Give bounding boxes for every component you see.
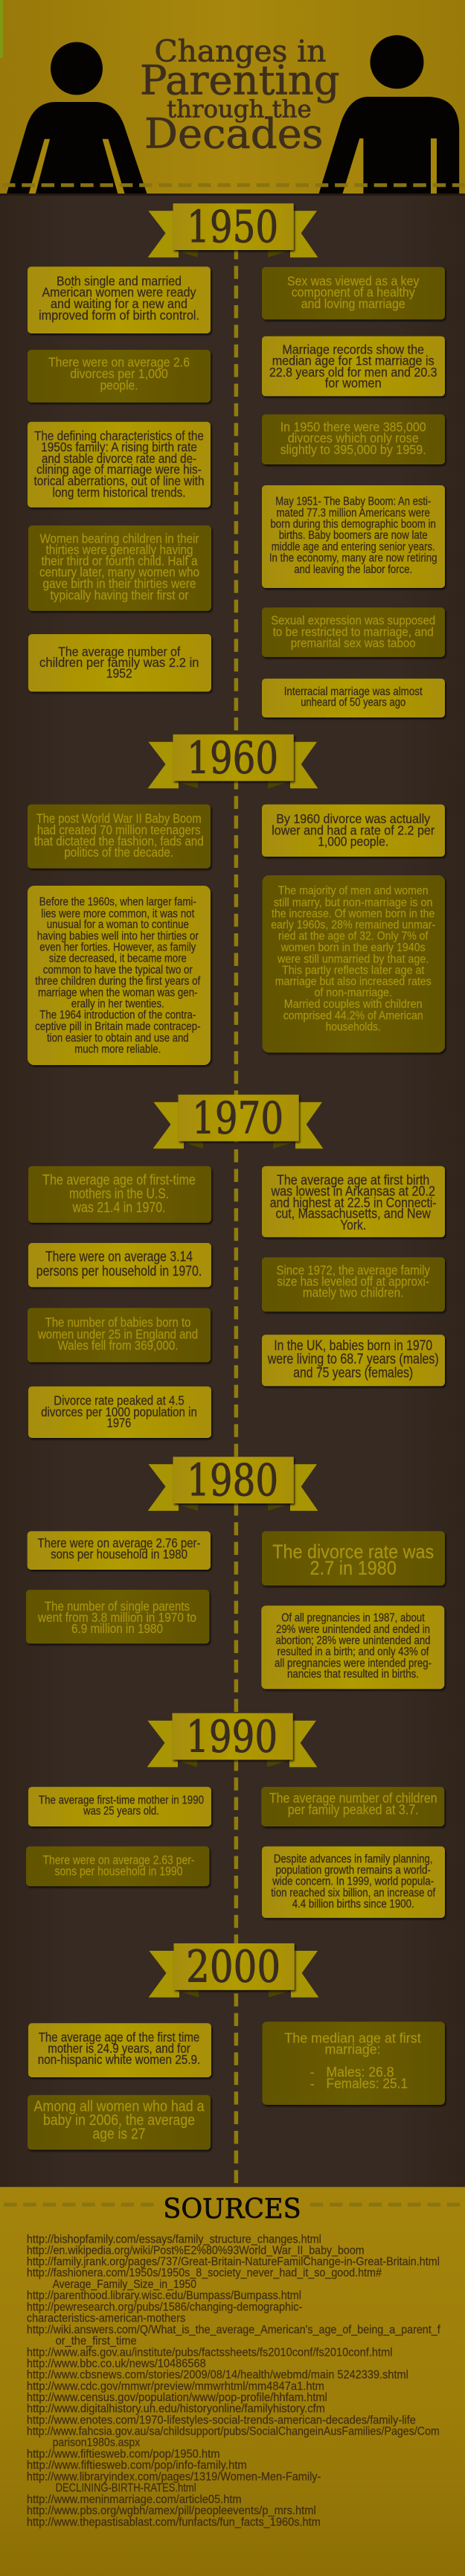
panel: 1950s family: 1950s family: A rising birth rate xyxy=(41,440,197,455)
panel: before the 1960s: size decreased, it became more xyxy=(49,953,187,965)
panel: first-time mothers 1970 xyxy=(28,1166,211,1223)
panel: pregnancies in 1987 xyxy=(261,1605,444,1689)
panel: baby boom: middle age and entering senior years. xyxy=(272,540,435,553)
panel: before the 1960s: unusual for a woman to continue xyxy=(47,918,189,931)
panel: persons per household 1970 xyxy=(28,1243,211,1287)
panel: women in thirties: gave birth in their thirties were xyxy=(43,576,196,591)
header panel xyxy=(0,0,465,196)
background: dark timeline xyxy=(0,194,465,2187)
panel: persons per household 1970: persons per household in 1970. xyxy=(36,1264,202,1279)
panel: sex and marriage xyxy=(262,267,445,319)
heading: sources: SOURCES xyxy=(163,2193,301,2225)
panel: women in thirties xyxy=(28,525,211,611)
panel: non-marriage on the increase: comprised 44.2% of American xyxy=(283,1009,423,1022)
source link list: parison1980s.aspx xyxy=(53,2437,140,2449)
panel: before the 1960s: common to have the typical two or xyxy=(43,964,193,977)
panel: first-time mother 1990: The average first-time mother in 1990 xyxy=(39,1794,204,1806)
panel: divorce by 1960: By 1960 divorce was actually xyxy=(276,811,430,826)
source link list: http://www.digitalhistory.uh.edu/historyonline/familyhistory.cfm xyxy=(27,2403,325,2415)
panel: non-marriage on the increase: still marry, but non-marriage is on xyxy=(274,896,433,909)
panel: 1950s family: torical aberrations, out of line with xyxy=(34,473,204,488)
panel: divorces per 1,000 xyxy=(28,350,211,403)
panel: before the 1960s xyxy=(28,886,211,1065)
source link list: http://www.fiftiesweb.com/pop/1950.htm xyxy=(27,2448,220,2461)
panel: 1950s family: and stable divorce rate and de- xyxy=(42,451,196,466)
panel: non-marriage on the increase: The majority of men and women xyxy=(278,885,429,898)
panel: birth control: and waiting for a new and xyxy=(51,296,187,311)
panel: divorces per 1,000: divorces per 1,000 xyxy=(70,366,168,381)
panel: sexual expression xyxy=(262,607,445,657)
panel: non-marriage on the increase: early 1960s, 28% remained unmar- xyxy=(271,919,435,932)
panel: interracial marriage: Interracial marriage was almost xyxy=(284,685,423,698)
panel: divorce rate 1980: The divorce rate was xyxy=(272,1540,434,1562)
panel: age at first birth by state: cut, Massachusetts, and New xyxy=(275,1206,432,1221)
panel: post-war teenagers: politics of the decade. xyxy=(64,845,173,860)
panel: pregnancies in 1987: 29% were unintended and ended in xyxy=(276,1623,430,1636)
decade ribbon: 1990 xyxy=(147,1710,317,1767)
icon: right parent figure xyxy=(319,35,459,194)
panel: first-time mother 1990 xyxy=(28,1787,211,1826)
panel: divorce by 1960: lower and had a rate of 2.2 per xyxy=(272,823,434,838)
panel: single parents: The number of single parents xyxy=(45,1599,190,1614)
source link list: http://parenthood.library.wisc.edu/Bumpass/Bumpass.html xyxy=(27,2289,301,2302)
decade ribbon: 2000 xyxy=(149,1941,318,1998)
panel: family size since 1972 xyxy=(262,1257,445,1311)
panel: family size since 1972: mately two children. xyxy=(303,1285,403,1300)
panel: before the 1960s: three children during the first years of xyxy=(35,975,201,988)
title xyxy=(140,35,340,157)
panel: median age at first marriage: The median age at first xyxy=(284,2030,421,2046)
decade ribbon: 1950: 1950 xyxy=(187,201,278,252)
panel: world population: 4.4 billion births since 1900. xyxy=(292,1898,414,1911)
panel: UK life expectancy: were living to 68.7 years (males) xyxy=(267,1352,439,1367)
panel: non-marriage on the increase: households. xyxy=(326,1021,381,1034)
panel: divorce rate peak: Divorce rate peaked at 4.5 xyxy=(54,1393,185,1408)
panel: average age 2006 xyxy=(28,2095,211,2150)
source link list: http://www.census.gov/population/www/pop-profile/hhfam.html xyxy=(27,2391,327,2404)
panel: divorces 1950 to 1959: divorces which only rose xyxy=(288,431,419,446)
panel: before the 1960s: The 1964 introduction of the contra- xyxy=(39,1009,196,1022)
panel: baby boom: May 1951- The Baby Boom: An esti- xyxy=(275,496,431,508)
panel: divorces per 1,000: There were on average 2.6 xyxy=(48,355,190,370)
source link list: http://www.meninmarriage.com/article05.htm xyxy=(27,2493,242,2506)
panel: divorces 1950 to 1959: In 1950 there were 385,000 xyxy=(280,419,426,434)
panel: women in thirties: typically having their first or xyxy=(51,587,189,602)
panel: non-marriage on the increase xyxy=(262,875,445,1052)
panel: divorce rate 1980: 2.7 in 1980 xyxy=(310,1557,397,1579)
panel: average age 2006: age is 27 xyxy=(92,2126,146,2142)
panel: divorce by 1960 xyxy=(262,805,445,857)
panel: average age 2006: baby in 2006, the average xyxy=(43,2112,195,2129)
panel: sources xyxy=(0,2187,465,2576)
panel: babies born to women under 25: The number of babies born to xyxy=(45,1315,190,1330)
title: Parenting xyxy=(140,57,340,104)
icon: left parent figure xyxy=(7,42,147,194)
title: through the xyxy=(167,95,312,123)
panel: family size since 1972: size has leveled off at approxi- xyxy=(277,1273,429,1288)
panel: divorce rate 1980 xyxy=(262,1531,445,1585)
panel: world population xyxy=(262,1847,445,1918)
panel: post-war teenagers: The post World War II Baby Boom xyxy=(36,811,202,826)
panel: divorce rate peak: divorces per 1000 population in xyxy=(41,1404,197,1419)
panel: before the 1960s: tion easier to obtain and use and xyxy=(47,1032,189,1044)
panel: median marriage age: 22.8 years old for men and 20.3 xyxy=(269,365,437,380)
source link list: http://www.pbs.org/wgbh/amex/pill/peopleevents/p_mrs.html xyxy=(27,2505,316,2517)
source link list: http://pewresearch.org/pubs/1586/changing-demographic- xyxy=(27,2301,302,2313)
decade ribbon: 1960: 1960 xyxy=(187,732,278,783)
source link list xyxy=(27,2233,440,2529)
panel: non-marriage on the increase: This partly reflects later age at xyxy=(282,965,425,977)
panel: children per family 1952: 1952 xyxy=(106,666,132,681)
panel: pregnancies in 1987: nancies that resulted in births. xyxy=(287,1668,419,1681)
panel: before the 1960s: having babies well into her thirties or xyxy=(37,930,199,943)
panel: birth control: Both single and married xyxy=(57,273,182,288)
panel: non-marriage on the increase: ried at the age of 32. Only 7% of xyxy=(278,930,429,943)
panel: before the 1960s: Before the 1960s, when larger fami- xyxy=(39,896,196,909)
panel: 1950s family: clining age of marriage were his- xyxy=(36,462,202,477)
panel: average age 2006: Among all women who had a xyxy=(34,2099,205,2115)
panel: median marriage age: Marriage records show the xyxy=(282,342,424,357)
decade ribbon: 2000: 2000 xyxy=(186,1941,280,1992)
source link list: http://www.libraryindex.com/pages/1319/Women-Men-Family- xyxy=(27,2471,321,2484)
decade ribbon: 1980: 1980 xyxy=(187,1454,278,1506)
panel: median marriage age xyxy=(262,336,445,396)
panel: UK life expectancy xyxy=(262,1335,445,1386)
panel: birth control: American women were ready xyxy=(42,285,196,300)
panel: age at first birth by state xyxy=(262,1166,445,1237)
panel: persons per household 1990: There were on average 2.63 per- xyxy=(43,1854,195,1867)
panel: single parents xyxy=(26,1590,210,1643)
panel: sexual expression: Sexual expression was supposed xyxy=(271,613,435,627)
source link list: http://www.enotes.com/1970-lifestyles-social-trends-american-decades/family-life xyxy=(27,2414,416,2426)
panel: birth control: improved form of birth control. xyxy=(39,307,199,322)
panel: 1950s family: long term historical trends. xyxy=(52,485,186,499)
panel: baby boom: born during this demographic boom in xyxy=(270,518,436,531)
panel: divorces per 1,000: people. xyxy=(100,377,138,392)
panel: age at first birth by state: and highest at 22.5 in Connecti- xyxy=(270,1195,437,1210)
panel: non-marriage on the increase: women born in the early 1940s xyxy=(280,942,426,954)
decade ribbon: 1990: 1990 xyxy=(186,1710,278,1762)
panel: persons per household 1990 xyxy=(26,1847,210,1886)
panel: pregnancies in 1987: all pregnancies were intended preg- xyxy=(275,1657,432,1669)
panel: interracial marriage xyxy=(262,679,445,717)
panel: first-time mother 1990: was 25 years old. xyxy=(83,1805,159,1818)
panel: world population: Despite advances in family planning, xyxy=(274,1853,433,1865)
panel: non-marriage on the increase: were still unmarried by that age. xyxy=(277,953,429,965)
panel: median age at first marriage: Males: 26.8 xyxy=(326,2064,394,2080)
panel: babies born to women under 25: women under 25 in England and xyxy=(37,1326,198,1341)
panel: first-time mothers 1970: was 21.4 in 1970. xyxy=(72,1201,165,1216)
source link list: http://www.fiftiesweb.com/pop/info-family.htm xyxy=(27,2459,247,2472)
decade ribbon: 1970 xyxy=(153,1092,323,1148)
source link list: http://www.aifs.gov.au/institute/pubs/factssheets/fs2010conf/fs2010conf.html xyxy=(27,2346,393,2359)
panel: non-marriage on the increase: Married couples with children xyxy=(284,998,423,1011)
panel: divorces 1950 to 1959 xyxy=(262,415,445,464)
panel: divorces 1950 to 1959: slightly to 395,000 by 1959. xyxy=(280,442,426,457)
panel: age at first birth by state: was lowest in Arkansas at 20.2 xyxy=(271,1183,435,1199)
panel: before the 1960s: erally in her twenties. xyxy=(71,998,164,1011)
panel: babies born to women under 25: Wales fell from 369,000. xyxy=(58,1337,179,1352)
panel: post-war teenagers xyxy=(28,805,211,869)
panel: single parents: went from 3.8 million in 1970 to xyxy=(37,1610,196,1625)
panel: median age at first marriage: Females: 25.1 xyxy=(326,2076,408,2091)
panel: single parents: 6.9 million in 1980 xyxy=(71,1621,163,1636)
panel: baby boom: In the economy, many are now retiring xyxy=(269,552,437,564)
title: Changes in xyxy=(155,35,326,69)
panel: birth control xyxy=(28,266,211,333)
panel: women in thirties: Women bearing children in their xyxy=(40,531,199,546)
panel: persons per household 1980 xyxy=(28,1531,211,1570)
panel: persons per household 1980: sons per household in 1980 xyxy=(51,1547,187,1562)
panel: first-time mother age 2000: mother is 24.9 years, and for xyxy=(48,2041,190,2056)
source link list: http://fashionera.com/1950s/1950s_8_society_never_had_it_so_good.htm# xyxy=(27,2267,382,2280)
panel: babies born to women under 25 xyxy=(28,1308,211,1362)
panel: children per family 1952 xyxy=(28,634,211,691)
panel: world population: tion reached six billion, an increase of xyxy=(271,1887,436,1899)
panel: non-marriage on the increase: the increase. Of women born in the xyxy=(272,907,434,920)
source link list: http://www.cdc.gov/mmwr/preview/mmwrhtml/mm4847a1.htm xyxy=(27,2380,324,2393)
source link list: characteristics-american-mothers xyxy=(27,2312,185,2324)
panel: children per family 1952: children per family was 2.2 in xyxy=(39,655,199,670)
panel: divorce rate peak xyxy=(28,1387,211,1438)
panel: sex and marriage: Sex was viewed as a key xyxy=(287,273,420,288)
decade ribbon: 1980 xyxy=(148,1454,318,1511)
panel: 1950s family xyxy=(28,422,211,508)
panel: women in thirties: thirties were generally having xyxy=(46,542,193,557)
panel: persons per household 1970: There were on average 3.14 xyxy=(45,1250,193,1265)
panel: first-time mother age 2000: The average age of the first time xyxy=(39,2030,199,2045)
panel: age at first birth by state: York. xyxy=(340,1217,366,1233)
panel: pregnancies in 1987: abortion; 28% were unintended and xyxy=(275,1634,430,1647)
panel: persons per household 1980: There were on average 2.76 per- xyxy=(37,1535,201,1550)
decade ribbon: 1970: 1970 xyxy=(192,1092,283,1143)
source link list: or_the_first_time xyxy=(56,2335,137,2348)
panel: divorce by 1960: 1,000 people. xyxy=(318,834,388,849)
panel: before the 1960s: marriage when the woman was gen- xyxy=(38,986,198,999)
panel: post-war teenagers: had created 70 million teenagers xyxy=(37,822,201,837)
panel: sex and marriage: and loving marriage xyxy=(301,296,405,311)
panel: world population: wide concern. In 1999, world popula- xyxy=(272,1876,434,1888)
source link list: http://www.thepastisablast.com/funfacts/fun_facts_1960s.htm xyxy=(27,2516,321,2529)
panel: first-time mother age 2000: non-hispanic white women 25.9. xyxy=(38,2052,200,2067)
panel: children per family 1952: The average number of xyxy=(58,644,180,659)
panel: median age at first marriage: marriage: xyxy=(324,2042,381,2057)
source link list: http://en.wikipedia.org/wiki/Post%E2%80%93World_War_II_baby_boom xyxy=(27,2245,365,2257)
panel: world population: population growth remains a world- xyxy=(275,1864,431,1877)
panel: baby boom: mated 77.3 million Americans were xyxy=(276,507,430,520)
panel: women in thirties: century later, many women who xyxy=(39,565,199,580)
panel: before the 1960s: much more reliable. xyxy=(74,1043,161,1055)
panel: children per family 1990 xyxy=(261,1787,444,1826)
panel: sexual expression: premarital sex was taboo xyxy=(291,636,416,651)
panel: median age at first marriage xyxy=(262,2022,445,2105)
source link list: http://www.bbc.co.uk/news/10486568 xyxy=(27,2357,206,2370)
panel: UK life expectancy: In the UK, babies born in 1970 xyxy=(274,1338,432,1354)
panel: persons per household 1990: sons per household in 1990 xyxy=(55,1865,183,1879)
panel: interracial marriage: unheard of 50 years ago xyxy=(301,697,405,709)
panel: before the 1960s: even her forties. However, as family xyxy=(39,942,196,954)
panel: baby boom: births. Baby boomers are now late xyxy=(279,529,428,542)
panel: pregnancies in 1987: resulted in a birth; and only 43% of xyxy=(277,1646,429,1658)
panel: post-war teenagers: that dictated the fashion, fads and xyxy=(34,834,204,848)
panel: first-time mothers 1970: The average age of first-time xyxy=(42,1173,196,1189)
panel: children per family 1990: per family peaked at 3.7. xyxy=(288,1801,419,1817)
panel: age at first birth by state: The average age at first birth xyxy=(277,1172,429,1188)
source link list: http://bishopfamily.com/essays/family_structure_changes.html xyxy=(27,2233,321,2246)
source link list: Average_Family_Size_in_1950 xyxy=(53,2278,196,2291)
decade ribbon: 1950 xyxy=(148,201,318,258)
panel: UK life expectancy: and 75 years (females) xyxy=(293,1366,413,1381)
panel: sexual expression: to be restricted to marriage, and xyxy=(273,625,434,639)
panel: family size since 1972: Since 1972, the average family xyxy=(276,1262,430,1277)
panel: median marriage age: median age for 1st marriage is xyxy=(272,353,434,368)
panel: 1950s family: The defining characteristics of the xyxy=(34,429,204,444)
panel: non-marriage on the increase: marriage but also increased rates xyxy=(275,976,432,988)
panel: median marriage age: for women xyxy=(325,376,382,391)
panel: pregnancies in 1987: Of all pregnancies in 1987, about xyxy=(281,1612,425,1625)
title: Decades xyxy=(144,109,323,157)
panel: divorce rate peak: 1976 xyxy=(107,1416,131,1431)
panel: women in thirties: their third or fourth child. Half a xyxy=(42,553,198,568)
decade ribbon: 1960 xyxy=(148,732,318,788)
panel: first-time mothers 1970: mothers in the U.S. xyxy=(69,1186,169,1202)
panel: sex and marriage: component of a healthy xyxy=(292,285,415,300)
panel: children per family 1990: The average number of children xyxy=(269,1790,437,1806)
panel: median age at first marriage: - xyxy=(310,2064,315,2080)
source link list: http://www.cbsnews.com/stories/2009/08/14/health/webmd/main 5242339.shtml xyxy=(27,2369,408,2382)
panel: before the 1960s: ceptive pill in Britain made contracep- xyxy=(35,1020,201,1033)
panel: baby boom xyxy=(262,485,445,588)
panel: first-time mother age 2000 xyxy=(28,2023,211,2077)
panel: before the 1960s: lies were more common, it was not xyxy=(41,907,195,920)
source link list: DECLINING-BIRTH-RATES.html xyxy=(56,2482,196,2495)
panel: median age at first marriage: - xyxy=(310,2076,315,2091)
panel: non-marriage on the increase: of non-marriage. xyxy=(314,987,392,1000)
panel: baby boom: and leaving the labor force. xyxy=(294,563,412,576)
